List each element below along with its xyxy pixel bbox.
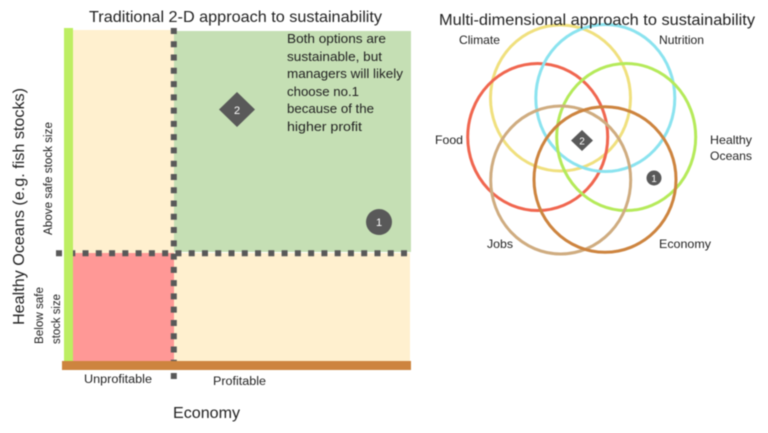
- annotation text: because of the: [287, 102, 374, 116]
- circle: healthy oceans: [557, 64, 696, 210]
- label: healthy oceans: Healthy: [710, 133, 752, 147]
- x-axis title: Economy: [173, 405, 240, 422]
- marker: option 1 circle: 1: [376, 217, 382, 229]
- label: economy: Economy: [659, 237, 711, 251]
- marker: option 1 circle: [646, 170, 662, 186]
- annotation text: Both options are: [287, 32, 386, 46]
- label: jobs: Jobs: [487, 237, 513, 251]
- marker: option 2 diamond: 2: [234, 105, 240, 117]
- quadrant: below safe, unprofitable: [73, 253, 174, 362]
- annotation text: sustainable, but: [287, 50, 383, 64]
- vertical dashed threshold: [171, 28, 177, 380]
- marker: option 2 diamond: [571, 130, 593, 151]
- axis bar: economy: [62, 361, 411, 370]
- circle: climate: [490, 25, 630, 171]
- axis bar: healthy oceans: [64, 28, 73, 362]
- horizontal dashed threshold: [56, 250, 410, 256]
- label: below safe stock size: Below safe: [34, 287, 46, 344]
- annotation text: managers will likely: [287, 67, 404, 81]
- y-axis title: Healthy Oceans (e.g. fish stocks): [11, 88, 28, 325]
- annotation text: choose no.1: [287, 85, 359, 99]
- marker: option 2 diamond: 2: [579, 136, 585, 148]
- marker: option 2 diamond: [219, 92, 255, 127]
- quadrant: below safe, profitable: [174, 253, 410, 362]
- label: climate: Climate: [459, 33, 500, 47]
- panel: 2-D quadrant chart: [34, 28, 411, 388]
- circle: jobs: [491, 106, 631, 254]
- label: healthy oceans: Oceans: [710, 149, 752, 163]
- title: traditional approach: Traditional 2-D approach to sustainability: [89, 9, 382, 26]
- marker: option 1 circle: [366, 209, 392, 235]
- label: profitable: Profitable: [213, 376, 266, 388]
- quadrant: above safe, profitable: [174, 31, 411, 252]
- label: food: Food: [435, 133, 463, 147]
- panel: venn diagram: [468, 24, 696, 254]
- label: nutrition: Nutrition: [659, 33, 704, 47]
- circle: nutrition: [536, 24, 675, 172]
- label: below safe stock size: stock size: [51, 294, 63, 344]
- annotation text: higher profit: [287, 120, 363, 134]
- label: unprofitable: Unprofitable: [84, 374, 152, 386]
- marker: option 1 circle: 1: [651, 174, 657, 185]
- circle: economy: [534, 107, 676, 252]
- title: multi-dimensional approach: Multi-dimensional approach to sustainability: [439, 12, 755, 29]
- circle: food: [468, 64, 608, 210]
- quadrant: above safe, unprofitable: [73, 30, 174, 253]
- label: above safe stock size: Above safe stock size: [43, 122, 55, 235]
